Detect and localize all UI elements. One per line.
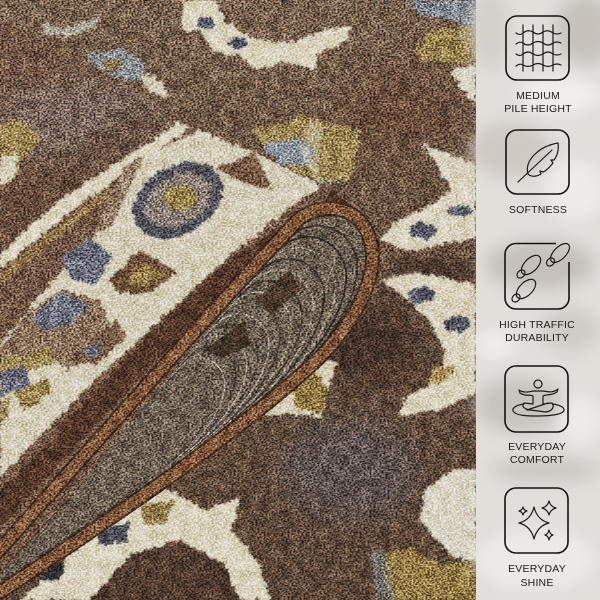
label: high traffic durability: HIGH TRAFFIC [499, 319, 575, 331]
icon: pile fibres [506, 16, 569, 80]
label: everyday comfort: EVERYDAY [508, 441, 566, 453]
rug photo background [0, 0, 476, 600]
motif: centre gold and blue flower [252, 115, 360, 184]
roll border: cream stripe and gold line [0, 122, 190, 286]
label: everyday shine: EVERYDAY [508, 563, 566, 575]
rosette: upper blue [130, 159, 225, 240]
feature: softness [506, 130, 569, 216]
binding edge [0, 208, 372, 596]
motif: gold flower below roll [250, 362, 336, 418]
motif: top-right blue, gold and cream [410, 0, 476, 106]
feature: everyday comfort [505, 366, 568, 466]
roll border: cream field [0, 130, 322, 478]
rosette: small gold leaf [62, 238, 178, 294]
label: high traffic durability: DURABILITY [505, 332, 569, 344]
motif: lower-right cream vine [380, 272, 476, 416]
carpet pile texture [0, 0, 476, 600]
motif: top cream arabesque [182, 0, 352, 70]
rosette: lower-left blue and gold [0, 292, 128, 420]
motif: upper-left cream and blue sprig [40, 17, 170, 98]
motif: bottom-right gold and cream [370, 468, 476, 600]
feature: medium pile height [504, 16, 572, 115]
icon: sparkles [505, 488, 568, 553]
side panel [470, 0, 600, 600]
icon: meditating figure [505, 366, 568, 432]
roll surface [0, 20, 358, 570]
label: softness: SOFTNESS [509, 204, 567, 216]
label: everyday shine: SHINE [520, 577, 554, 589]
icon: feather [506, 130, 569, 194]
motif: bottom cream arabesque [20, 488, 270, 600]
roll border: outer dark band [0, 198, 345, 520]
motif: gold flower on roll [0, 120, 42, 186]
rolled rug corner [0, 20, 372, 596]
feature: everyday shine [505, 488, 568, 589]
label: everyday comfort: COMFORT [510, 454, 565, 466]
label: medium pile height: PILE HEIGHT [504, 103, 572, 115]
label: medium pile height: MEDIUM [516, 90, 560, 102]
rug underside [0, 215, 368, 590]
motif: right cream vine with blue rosettes [380, 143, 476, 252]
underside woven stripes [0, 226, 357, 582]
icon: footprints [505, 240, 573, 309]
feature: high traffic durability [499, 240, 575, 344]
